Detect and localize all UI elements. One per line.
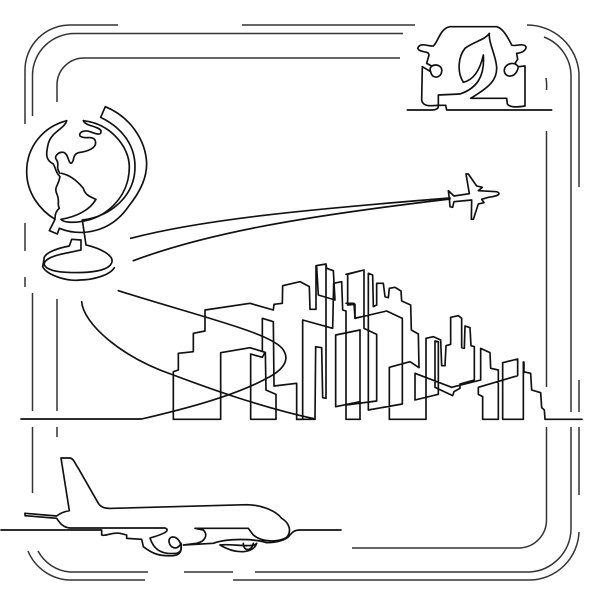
contrail swooshes <box>131 198 450 261</box>
city skyline: left <box>173 264 360 419</box>
icon: large airliner <box>1 458 341 556</box>
city skyline: right <box>346 270 582 419</box>
ground line and city swooshes <box>21 291 315 419</box>
icon: car with leaf <box>407 27 552 110</box>
icon: globe <box>27 107 147 280</box>
icon: small airplane <box>448 174 499 219</box>
